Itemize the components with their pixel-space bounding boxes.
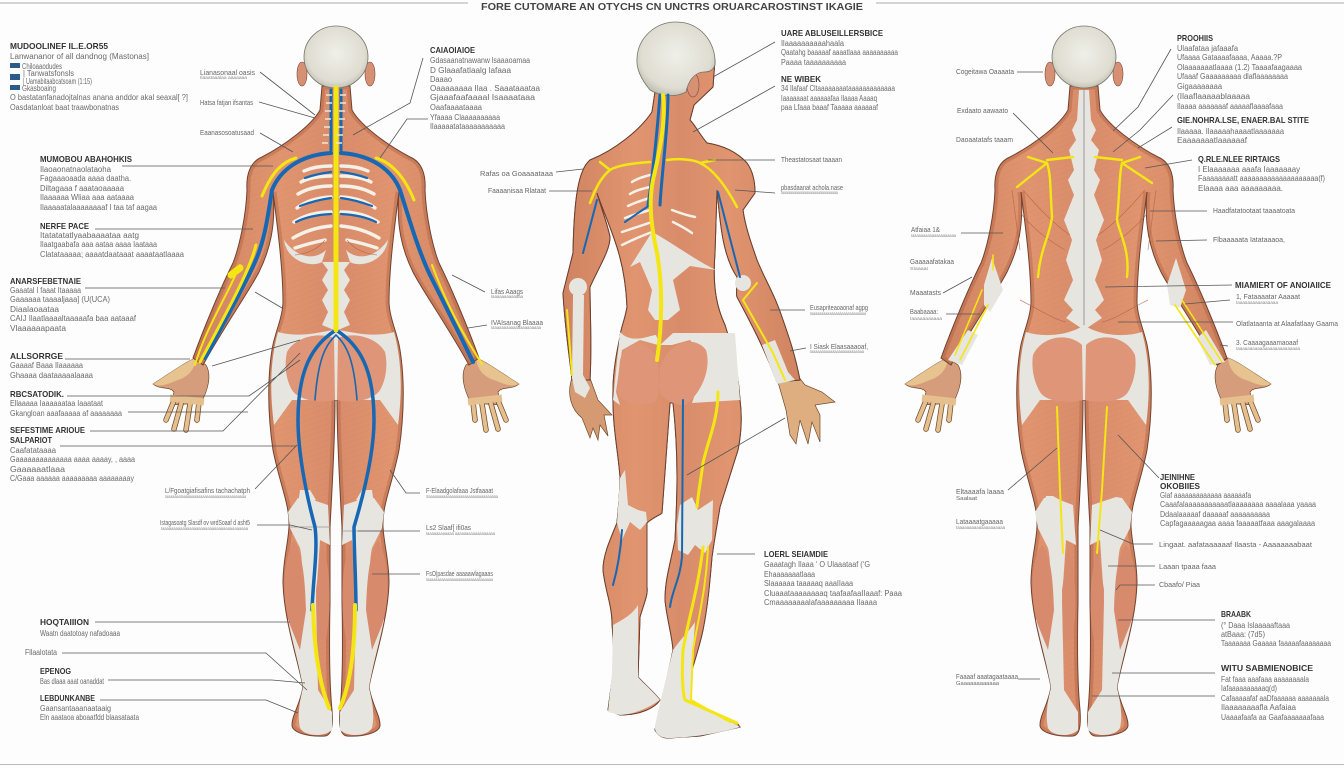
text block: proohiis section: PROOHIIS bbox=[1177, 33, 1213, 43]
text block: loerl section bbox=[764, 549, 903, 607]
mini labels: figure 2 right: pbasdaanat achola.nase bbox=[781, 183, 843, 192]
text block: witu section: Fat faaa aaafaaa aaaaaaaala bbox=[1221, 675, 1309, 684]
mini labels: figure 3 left: Lataaaatgaaaaa bbox=[956, 517, 1003, 526]
mini labels: figure 2 right: Iaaaaaaaaaaaaaaaaaaaaaaaaaaa bbox=[810, 311, 866, 316]
text block: jeinihne section: Glaf aaaaaaaaaaaaa aaaaaafa bbox=[1160, 491, 1251, 500]
bottom rule bbox=[0, 764, 1344, 766]
figure 3 body silhouette bbox=[905, 62, 1271, 736]
figure 2 body silhouette bbox=[563, 60, 800, 738]
text block: proohiis section: (Ilaaflaaaaablaaaaa bbox=[1177, 92, 1251, 101]
mini labels: figure 1: Iaaaaaaaaaaaa aaaaaaaaaaaaaaaaaa bbox=[426, 531, 496, 536]
figure 1 blue nerves bbox=[205, 90, 473, 610]
text block: muscle section: Diltagaaa f aaataoaaaaa bbox=[40, 184, 125, 193]
figure 1 yellow spinal cord and branches bbox=[195, 88, 482, 708]
text block: allsorge section: Gaaaaf Baaa Ilaaaaaa bbox=[10, 361, 83, 370]
text block: caiaoiaioe section: Oaafaaaataaaa bbox=[430, 103, 483, 112]
text block: jeinihne section: Caaafalaaaaaaaaaaatlaaaaaaaa aaaalaaa yaaaa bbox=[1160, 500, 1316, 509]
text block: jeinihne section: Ddaalaaaaaf daaaaaf aaaaaaaaaa bbox=[1160, 510, 1270, 519]
mini labels: figure 3 left: Atfaiaa 1& bbox=[911, 225, 940, 234]
text block: lebdunkanbe section: LEBDUNKANBE bbox=[40, 693, 95, 703]
mini labels: figure 2 right: Iaaaaaaaaaaaaaaaaaaaaaaaaa bbox=[810, 349, 864, 354]
text block: jeinihne section: JEINIHNE bbox=[1160, 472, 1195, 482]
text block: rirtaigs section: Faaaaaaaatt aaaaaaaaaaaaaaaaaaaa(f) bbox=[1198, 174, 1325, 183]
text block: anatomy section: Vlaaaaaapaata bbox=[10, 324, 67, 333]
mini labels: figure 1: Ilaaataaalaa aaaaaaa bbox=[200, 75, 248, 80]
text block: loerl section: Ehaaaaaaatlaaa bbox=[764, 570, 815, 579]
figure 1 body silhouette bbox=[153, 62, 519, 736]
figure 1 ribs and central tendon bbox=[284, 166, 388, 330]
mini labels: figure 3 left: Faaaaf aaatagaataaaa bbox=[956, 672, 1018, 681]
text block: braabk section bbox=[1221, 609, 1331, 648]
text block: hoqtaiion section: Waatn daatotoay nafadoaaa bbox=[40, 629, 120, 638]
text block: proohiis section: Gigaaaaaaaa bbox=[1177, 82, 1223, 91]
text block: loerl section: Cluaaataaaaaaaaq taafaafaaIIaaaf: Paaa bbox=[764, 589, 903, 598]
mini labels: figure 3 right: Olatlataanta at Alaafatlaay Gaama bbox=[1236, 319, 1338, 328]
figure 2 hands bbox=[570, 376, 835, 444]
text block: miamiert section bbox=[1235, 280, 1331, 351]
text block: sefestime section: Caafatataaaa bbox=[10, 446, 57, 455]
text block: witu section: Ilaaaaaaaafla Aafaiaa bbox=[1221, 703, 1297, 712]
icon: legend swatches bbox=[10, 63, 20, 90]
mini labels: figure 3 left: Iaaaaaaaaaaa bbox=[910, 316, 943, 321]
mini labels: figure 2 right bbox=[781, 155, 868, 354]
text block: uare section: Ilaaaaaaaaaahaala bbox=[781, 39, 844, 48]
text block: rirtaigs section: Elaaaa aaa aaaaaaaaa. bbox=[1198, 184, 1283, 193]
text block: muscle section: Ilaoaonatnaolataoha bbox=[40, 165, 112, 174]
mini labels: figure 1: Iaaaaaaaaaaaaaaaaaaaaaaaaaaaaaaaa bbox=[426, 577, 493, 582]
mini labels: figure 3 right: Haadfatatootaat taaaatoata bbox=[1213, 206, 1295, 215]
text block: recsatodik section: Ellaaaaa Iaaaaaataa Iaaataat bbox=[10, 399, 104, 408]
mini labels: figure 1: Ls2 Slaaf[ ifi0as bbox=[426, 523, 471, 532]
label: fllaalotata: Fllaalotata bbox=[25, 648, 57, 657]
text block: nerve section: Clatataaaaa; aaaatdaataaat aaaataatlaaaa bbox=[40, 250, 185, 259]
mini labels: figure 3 left: Gaaaaafatakaa bbox=[910, 257, 954, 266]
text block: caiaoiaioe section: Gdasaanatnawanw lsaaaoamaa bbox=[430, 56, 530, 65]
text block: ne wibek section: Iaaaaaaat aaaaaafaa Ilaaaa Aaaaq bbox=[781, 94, 877, 103]
mini labels: figure 1: Eaanasosoatusaad bbox=[200, 128, 254, 137]
text block: top-left legend: Oasdatanloat baat traawbonatnas bbox=[10, 103, 119, 112]
mini labels: figure 2 right: Eusapriteaoaonaf agpg bbox=[810, 303, 868, 312]
mini labels: figure 2 left: Faaaanisaa Rlataat bbox=[488, 186, 546, 195]
text block: top-left legend: MUDOOLINEF IL.E.OR55 bbox=[10, 41, 108, 51]
text block: recsatodik section bbox=[10, 389, 122, 418]
text block: proohiis section: Ufaaaf Gaaaaaaaaa dlaflaaaaaaaa bbox=[1177, 72, 1288, 81]
text block: caiaoiaioe section: Ilaaaaatataaaaaaaaaaa bbox=[430, 122, 505, 131]
mini labels: figure 1 bbox=[160, 68, 543, 582]
text block: hoqtaiion section bbox=[40, 617, 120, 638]
text block: top-left legend: Gkasboaing bbox=[22, 84, 56, 93]
text block: ne wibek section: 34 Ilafaaf Cltaaaaaaaataaaaaaaaaaaaa bbox=[781, 84, 895, 93]
text block: rirtaigs section: Q.RLE.NLEE RIRTAIGS bbox=[1198, 154, 1280, 164]
figure 3 yellow nerves bbox=[955, 157, 1222, 553]
text block: uare section: Paaaa taaaaaaaaaa bbox=[781, 58, 846, 67]
text block: nerve section bbox=[40, 221, 185, 259]
text block: nerve section: NERFE PACE bbox=[40, 221, 89, 231]
text block: hoqtaiion section: HOQTAIIION bbox=[40, 617, 89, 627]
text block: proohiis section: Ulaafataa jafaaafa bbox=[1177, 44, 1239, 53]
mini labels: figure 1: Iaaaaaaataaaaaaaaaaaaaaaaaaaaaaaaaaaaaaa bbox=[165, 494, 246, 499]
text block: loerl section: Gaaatagh Ilaaa ‘ O Ulaaataaf (‘G bbox=[764, 560, 870, 569]
mini labels: figure 3 left: Iaaaaaaaaaaaaaaaaaaaa bbox=[911, 233, 956, 238]
text block: caiaoiaioe section bbox=[430, 45, 541, 131]
text block: lebdunkanbe section bbox=[40, 693, 139, 722]
text block: uare section: UARE ABLUSEILLERSBICE bbox=[781, 28, 883, 38]
text block: uare section: Qaatahg baaaaaf aaaatlaaa aaaaaaaaaa bbox=[781, 48, 898, 57]
mini labels: figure 1: Iaaaaaaaaaaaaa bbox=[491, 294, 524, 299]
mini labels: figure 1: L/Fgoatgiafisafins tachachatph bbox=[165, 486, 250, 495]
leader lines: figure 1 bbox=[60, 58, 487, 713]
figure 1: posterior nerve view bbox=[153, 26, 519, 736]
text block: sefestime section: SEFESTIME ARIOUE bbox=[10, 425, 85, 435]
figure 2: three-quarter view bbox=[563, 22, 835, 738]
text block: allsorge section: Ghaaaa daataaaaalaaaa bbox=[10, 371, 94, 380]
figure 3 hip, knee and shin tendons bbox=[948, 258, 1225, 735]
mini labels: figure 3 left: Cogeitawa Oaaaata bbox=[956, 67, 1014, 76]
text block: muscle section bbox=[40, 154, 158, 212]
mini labels: figure 1: Lianasonaal oasis bbox=[200, 68, 255, 77]
figure 3 head bbox=[1052, 26, 1116, 88]
text block: braabk section: (° Daaa Islaaaaaftaaa bbox=[1221, 621, 1290, 630]
mini labels: figure 1: Saaaaaaaaaaaaaaaaaaaaaaaaaaaaaaaaa bbox=[426, 494, 498, 499]
mini labels: figure 3 left: Eltaaaafa laaaa bbox=[956, 487, 1004, 496]
figure 1 head bbox=[304, 26, 368, 88]
text block: sefestime section bbox=[10, 425, 135, 483]
text block: epenog section: Bas dlaaa aaat oanaddat bbox=[40, 677, 105, 686]
mini labels: figure 3 left: Daoaatatafs taaam bbox=[956, 135, 1013, 144]
mini labels: figure 3 right: Flbaaaaata Iatataaaoa, bbox=[1213, 235, 1285, 244]
text block: top-left legend: Chiloaaodudes bbox=[22, 62, 62, 71]
mini labels: figure 1: F-Elaadgolafaaa Jstfaaaat bbox=[426, 486, 493, 495]
mini labels: figure 3 left: Baabaaaa: bbox=[910, 307, 938, 316]
text block: ne wibek section: paa Lfaaa baaaf Taaaaa aaaaaaf bbox=[781, 103, 879, 112]
text block: ne wibek section bbox=[781, 74, 895, 112]
text block: braabk section: BRAABK bbox=[1221, 609, 1252, 619]
mini labels: figure 2 right: Iaaaaaaaaaaaaaaaaaaaaaaaaaaaa bbox=[781, 190, 838, 195]
text block: jeinihne section: OKOBIIES bbox=[1160, 481, 1200, 491]
mini labels: figure 1: IVAIsanag Blaaaa bbox=[491, 318, 543, 327]
text block: miamiert section: Iaaaaaaaaaaaaaaaa bbox=[1236, 300, 1279, 305]
text block: rirtaigs section bbox=[1198, 154, 1325, 193]
mini labels: figure 3 right: Lingaat. aafataaaaaaf Ilaasta - Aaaaaaaabaat bbox=[1159, 540, 1312, 549]
text block: witu section: WITU SABMIENOBICE bbox=[1221, 663, 1313, 673]
text block: witu section: Uaaaafaafa aa Gaafaaaaaaafaaa bbox=[1221, 713, 1324, 722]
text block: general section: Ilaaaaa. Ilaaaaahaaaatlaaaaaaa bbox=[1177, 127, 1285, 136]
text block: general section: GIE.NOHRA.LSE, ENAER.BAL STITE bbox=[1177, 115, 1309, 125]
figure 1 hip, knee and shin tendons bbox=[271, 330, 401, 735]
text block: jeinihne section bbox=[1160, 472, 1316, 528]
text block: top-left legend: | Uamabitaabcatsoam (1:15) bbox=[23, 77, 92, 86]
mini labels: figure 3 right: Cbaafo/ Piaa bbox=[1159, 580, 1200, 589]
mini labels: figure 1: Lifas Aaags bbox=[491, 287, 523, 296]
text block: witu section bbox=[1221, 663, 1329, 722]
text block: sefestime section: SALPARIOT bbox=[10, 435, 53, 445]
text block: miamiert section: 1, Fataaaatar Aaaaat bbox=[1236, 292, 1300, 301]
text block: top-left legend: Lanwananor of all dandnog (Mastonas] bbox=[10, 52, 149, 61]
text block: ne wibek section: NE WIBEK bbox=[781, 74, 822, 84]
text block: nerve section: Itatatatatlyaabaaaataa aatg bbox=[40, 231, 139, 240]
text block: caiaoiaioe section: Daaao bbox=[430, 75, 453, 84]
text block: epenog section bbox=[40, 666, 105, 686]
text block: proohiis section: Olaaaaaaatlaaaa (1.2) Taaaafaagaaaa bbox=[1177, 63, 1302, 72]
text block: caiaoiaioe section: CAIAOIAIOE bbox=[430, 45, 475, 55]
title: FORE CUTOMARE AN OTYCHS CN UNCTRS ORUARCAROSTINST IKAGIE bbox=[481, 2, 863, 13]
text block: caiaoiaioe section: Yfaaaa Claaaaaaaaaa bbox=[430, 113, 500, 122]
text block: general section bbox=[1177, 115, 1309, 145]
text block: loerl section: Cmaaaaaaaalafaaaaaaaaa Ilaaaa bbox=[764, 598, 878, 607]
text block: anatomy section: Gaaaaaa taaaaljaaa] (U(UCA) bbox=[10, 295, 110, 304]
text block: miamiert section: Iaaaaaaaaaaaaaaaaaaaaaaaaa bbox=[1236, 346, 1301, 351]
figure 2 nerves bbox=[567, 95, 785, 723]
text block: anatomy section: Gaaatal I faaat Itaaaaa bbox=[10, 286, 81, 295]
text block: recsatodik section: Gkangloan aaafaaaaa af aaaaaaaa bbox=[10, 409, 122, 418]
text block: anatomy section: CAIJ Ilaatlaaaaltaaaaafa baa aataaaf bbox=[10, 314, 137, 323]
figure 3: posterior muscle view bbox=[905, 26, 1271, 736]
text block: allsorge section: ALLSORRGE bbox=[10, 351, 63, 361]
text block: allsorge section bbox=[10, 351, 94, 380]
mini labels: figure 1: Iaaaaaaaaaaaaaaaaaaaaaaaaaaaaaaaaaaaaaa bbox=[161, 526, 249, 531]
text block: general section: Eaaaaaaatlaaaaaaf bbox=[1177, 136, 1248, 145]
mini labels: figure 2 left: Rafas oa Goaaaataaa bbox=[480, 169, 553, 178]
leader lines: figure 3 bbox=[943, 49, 1233, 696]
text block: proohiis section: Ufaaaa Gataaaafaaaa, Aaaaa.?P bbox=[1177, 53, 1282, 62]
text block: anatomy section: Diaalaoaataa bbox=[10, 305, 60, 314]
mini labels: figure 3 left: Exdaato aawaato bbox=[957, 106, 1008, 115]
mini labels: figure 2 right: Theastatosaat taaaan bbox=[781, 155, 842, 164]
mini labels: figure 3 right: Laaan tpaaa faaa bbox=[1159, 562, 1216, 571]
text block: loerl section: LOERL SEIAMDIE bbox=[764, 549, 828, 559]
text block: lebdunkanbe section: Eln aaataoa aboaatfdd blaasataata bbox=[40, 713, 139, 722]
text block: braabk section: atBaaa: (7d5) bbox=[1221, 630, 1265, 639]
text block: proohiis section bbox=[1177, 33, 1302, 111]
text block: muscle section: MUMOBOU ABAHOHKIS bbox=[40, 154, 132, 164]
leader lines: figure 2 bbox=[549, 42, 806, 554]
mini labels: figure 2 left bbox=[480, 169, 553, 195]
figure 3 central spine tendon bbox=[1064, 90, 1104, 330]
text block: caiaoiaioe section: Oaaaaaaaa Ilaa . Saaataaataa bbox=[430, 84, 541, 93]
mini labels: figure 2 right: I Siask Elaasaaaoaf, bbox=[810, 342, 868, 351]
text block: muscle section: Ilaaaaatalaaaaaaaaf I taa taf aagaa bbox=[40, 203, 158, 212]
text block: loerl section: Slaaaaaa taaaaaq aaaIIaaa bbox=[764, 579, 853, 588]
text block: miamiert section: 3. Caaaagaaamaoaaf bbox=[1236, 338, 1298, 347]
text block: uare section bbox=[781, 28, 898, 67]
mini labels: figure 3 left: Maaatasts bbox=[910, 288, 941, 297]
mini labels: figure 3 left: Staaaat bbox=[910, 266, 929, 271]
text block: sefestime section: C/Gaaa aaaaaa aaaaaaaaa aaaaaaaay bbox=[10, 474, 134, 483]
text block: anatomy section bbox=[10, 276, 137, 333]
text block: sefestime section: Gaaaaaaaaaaaaaa aaaa aaaay, , aaaa bbox=[10, 455, 135, 464]
mini labels: figure 3 left: Iaaaaaaaaaaaaaaaaaaaa bbox=[956, 525, 1006, 530]
text block: sefestime section: Gaaaaaatlaaa bbox=[10, 465, 66, 474]
text block: muscle section: Fagaaaoaada aaaa daatha. bbox=[40, 174, 131, 183]
figure 2 white tendons bbox=[569, 175, 795, 738]
text block: top-left legend: | Tanwatsfonsls bbox=[23, 69, 74, 78]
text block: caiaoiaioe section: D Glaaafatlaalg lafaaa bbox=[430, 66, 512, 75]
text block: nerve section: Ilaatgaabafa aaa aataa aaaa Iaataaa bbox=[40, 240, 157, 249]
text block: anatomy section: ANARSFEBETNAIE bbox=[10, 276, 81, 286]
figure 1 neck vertebrae bbox=[322, 95, 350, 143]
mini labels: figure 1: Iaaaaaaaaaaaaaaaaaaaaa bbox=[491, 325, 542, 330]
text block: lebdunkanbe section: Gaansantaaanaataaig bbox=[40, 704, 111, 713]
text block: top-left legend: O bastatanfanadojtalnas anana anddor akal seaxal[ ?] bbox=[10, 93, 188, 102]
figure 3 muscle contour lines bbox=[1012, 190, 1156, 322]
mini labels: figure 1: FsO|pasdae aaaaawlagaaas bbox=[426, 569, 493, 578]
mini labels: figure 1: Hatsa fatjan ifsantas bbox=[200, 98, 253, 107]
text block: epenog section: EPENOG bbox=[40, 666, 71, 676]
mini labels: figure 3 left bbox=[910, 67, 1018, 687]
mini labels: figure 1: Istagasoatg Slasdf ov wrdSoaaf d asht5 bbox=[160, 518, 250, 527]
mini labels: figure 3 left: Saalaat bbox=[956, 496, 978, 502]
text block: rirtaigs section: I Elaaaaaaa aaafa Iaaaaaaay bbox=[1198, 165, 1300, 174]
text block: top-left legend bbox=[10, 41, 188, 112]
text block: witu section: Iafaaaaaaaaaaq(d) bbox=[1221, 684, 1277, 693]
mini labels: figure 3 left: Gaaaaaaaaaaaa bbox=[956, 681, 1000, 687]
text block: caiaoiaioe section: Gjaaafaafaaaal Isaaaataaa bbox=[430, 93, 536, 102]
text block: muscle section: Ilaaaaaa Wliaa aaa aataaaa bbox=[40, 193, 135, 202]
mini labels: figure 3 right bbox=[1159, 206, 1338, 589]
text block: miamiert section: MIAMIERT OF ANOIAIICE bbox=[1235, 280, 1331, 290]
figure 2 head bbox=[637, 22, 715, 96]
text block: recsatodik section: RBCSATODIK. bbox=[10, 389, 64, 399]
text block: proohiis section: Ilaaaa aaaaaaaf aaaaaflaaaafaaa bbox=[1177, 102, 1283, 111]
text block: jeinihne section: Capfagaaaaagaa aaaa faaaaatfaaa aaagalaaaa bbox=[1160, 519, 1316, 528]
